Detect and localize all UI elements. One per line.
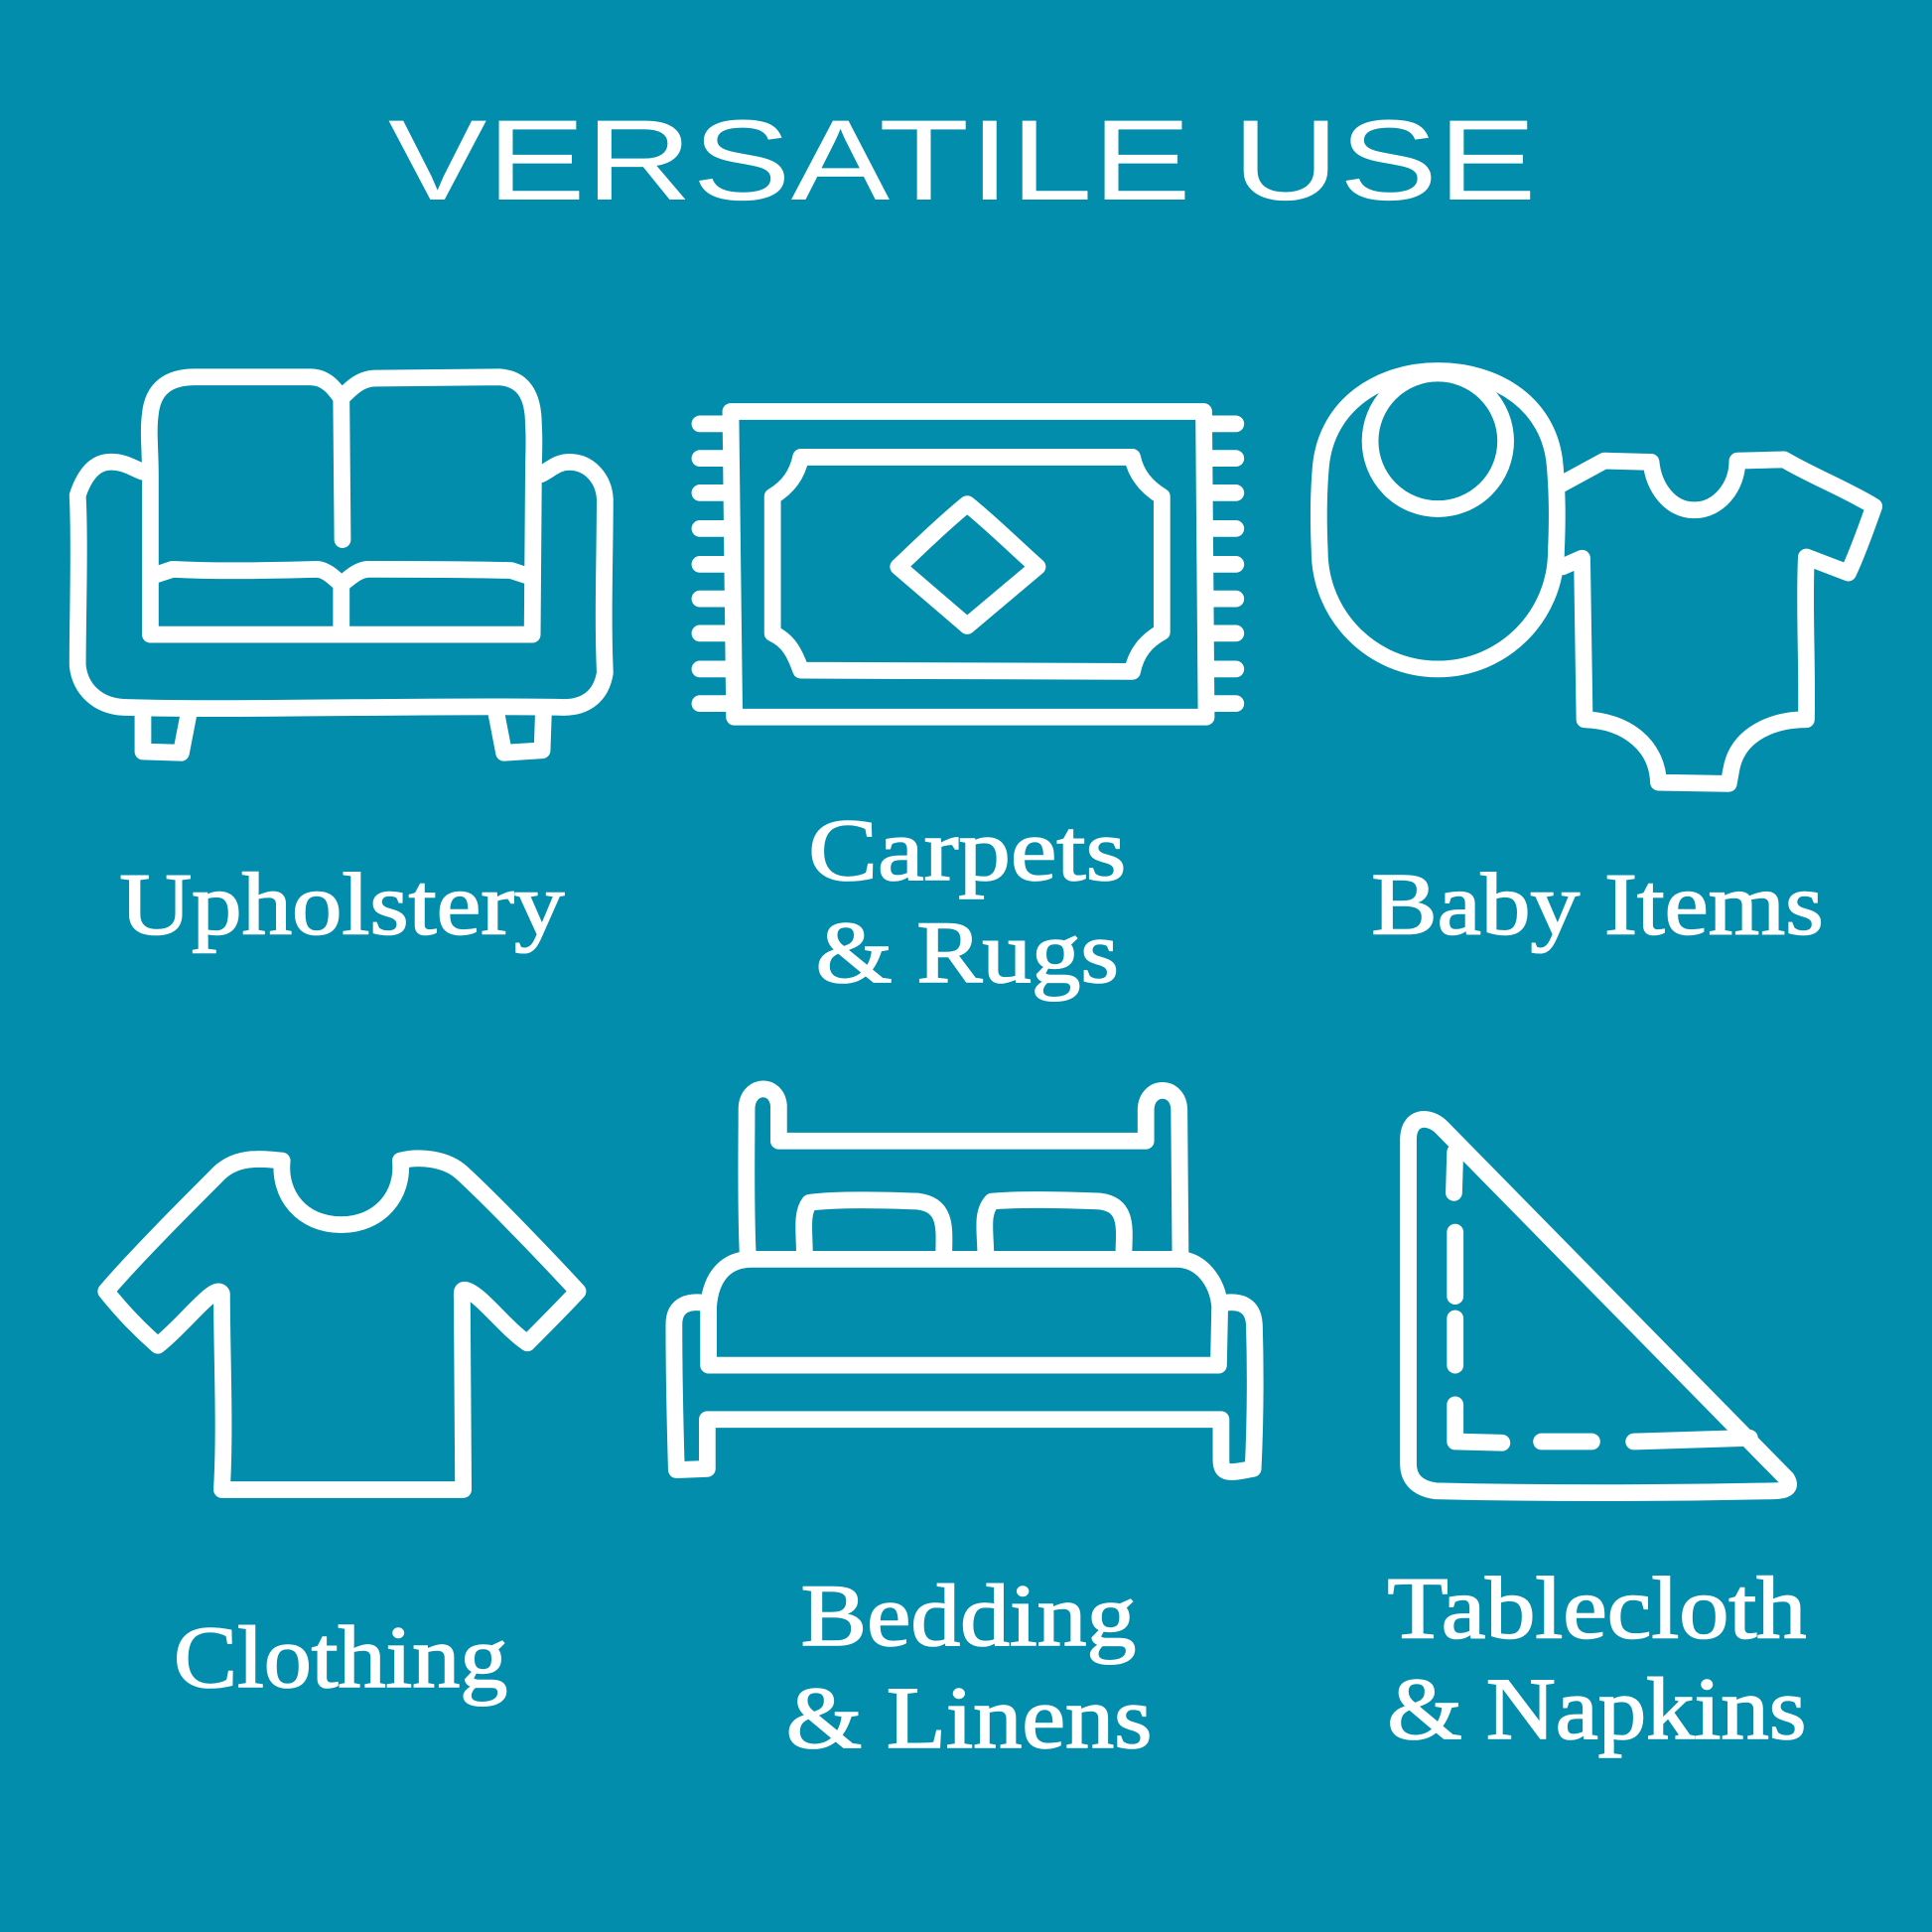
label: clothing: Clothing [174, 1608, 507, 1707]
icon: bib and onesie [1318, 371, 1874, 783]
panel: upholstery [77, 377, 605, 954]
icon: bed [674, 1089, 1255, 1472]
panel: baby items [1318, 371, 1874, 954]
label: carpets and rugs: & Rugs [816, 903, 1119, 1002]
label: upholstery: Upholstery [119, 856, 565, 954]
label: carpets and rugs: Carpets [808, 801, 1126, 899]
label: bedding and linens [786, 1567, 1152, 1767]
icon: sofa [77, 377, 605, 753]
title: VERSATILE USE [388, 97, 1537, 224]
label: bedding and linens: & Linens [786, 1669, 1152, 1767]
label: tablecloth and napkins: Tablecloth [1387, 1559, 1806, 1657]
label: tablecloth and napkins: & Napkins [1387, 1660, 1806, 1758]
panel: carpets and rugs [700, 412, 1236, 1002]
label: baby items: Baby Items [1371, 856, 1824, 954]
label: bedding and linens: Bedding [801, 1567, 1136, 1665]
label: tablecloth and napkins [1387, 1559, 1806, 1758]
icon: t-shirt [106, 1159, 578, 1489]
icon: rug [700, 412, 1236, 717]
panel: bedding and linens [674, 1089, 1255, 1767]
icon: folded napkin [1409, 1119, 1789, 1493]
panel: tablecloth and napkins [1387, 1119, 1806, 1758]
label: carpets and rugs [808, 801, 1126, 1002]
panel: clothing [106, 1159, 578, 1707]
